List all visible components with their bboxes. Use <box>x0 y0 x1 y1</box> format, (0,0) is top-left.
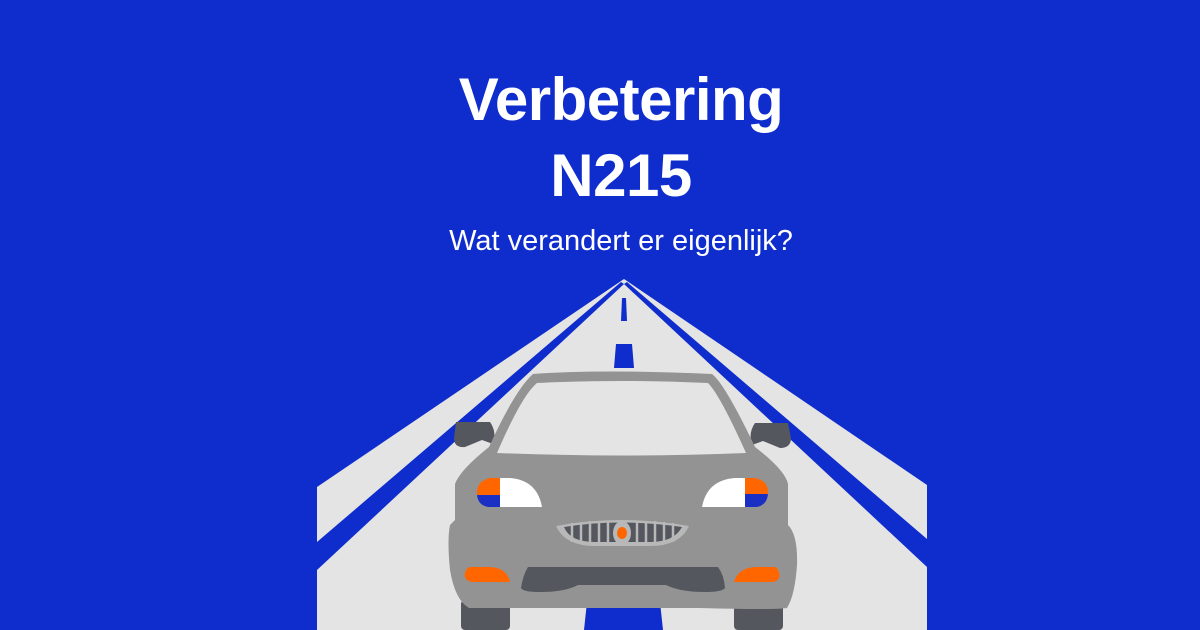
road <box>317 279 927 630</box>
title: Verbetering <box>459 66 783 133</box>
car <box>448 372 797 630</box>
body <box>448 372 797 609</box>
title: N215 <box>550 142 692 209</box>
intake <box>521 567 725 592</box>
grille <box>556 520 689 546</box>
headlights <box>477 478 542 507</box>
subtitle: Wat verandert er eigenlijk? <box>449 225 793 257</box>
windshield <box>497 381 746 456</box>
fog lights <box>465 567 510 582</box>
wheels <box>461 600 510 630</box>
title <box>459 66 783 209</box>
mirrors <box>454 422 494 447</box>
